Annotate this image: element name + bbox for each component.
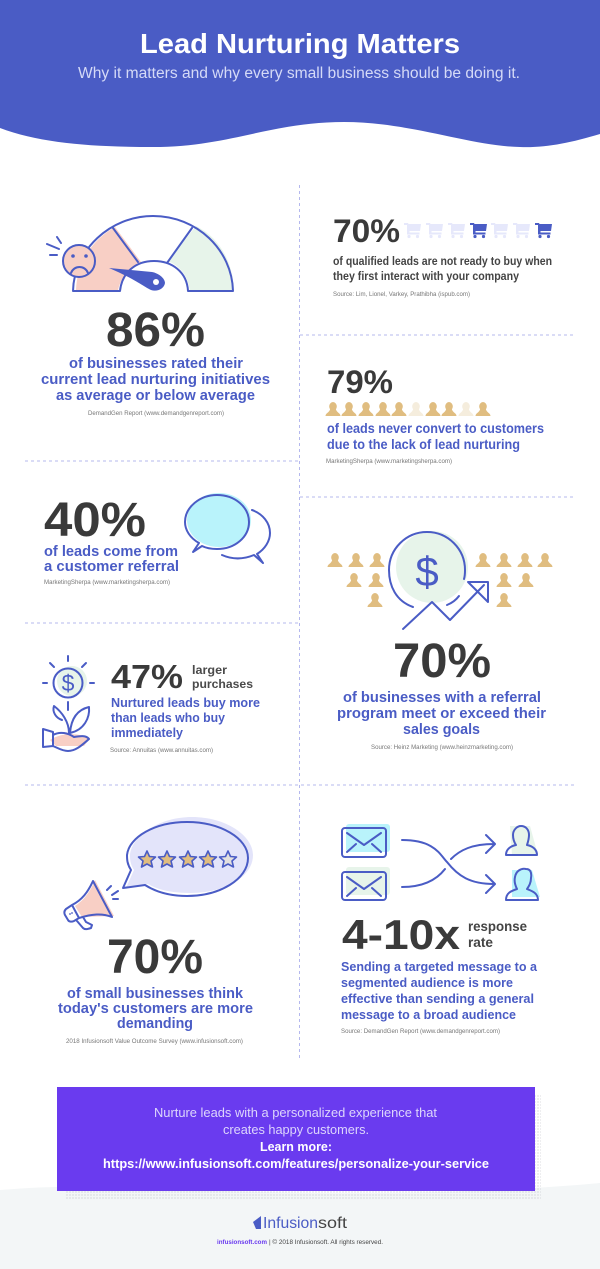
description: immediately (111, 725, 184, 740)
column and row dividers (25, 185, 575, 1058)
description: of leads come from (44, 543, 178, 560)
source: 2018 Infusionsoft Value Outcome Survey (www.infusionsoft.com) (66, 1038, 243, 1045)
description (327, 421, 544, 452)
header banner (0, 0, 600, 147)
description (41, 356, 270, 404)
stat label: larger (192, 663, 227, 677)
description: sales goals (403, 722, 480, 738)
panel: 86 percent gauge (41, 216, 270, 417)
stat: 70%: 70% (393, 635, 491, 688)
icon: envelopes routed to people (342, 824, 540, 900)
description: message to a broad audience (341, 1007, 516, 1022)
panel: 70 percent referral program (328, 531, 552, 751)
stat: 70%: 70% (107, 931, 203, 984)
description (58, 986, 253, 1032)
panel: 40 percent referral (44, 493, 270, 586)
source: MarketingSherpa (www.marketingsherpa.com) (326, 458, 452, 465)
panel: 70 percent demanding customers (58, 817, 253, 1045)
call to action text: Nurture leads with a personalized experience that (154, 1106, 438, 1120)
panel: 4-10x response rate (341, 824, 540, 1035)
call to action (57, 1087, 541, 1199)
description: segmented audience is more (341, 975, 513, 990)
stat label: purchases (192, 677, 253, 691)
logo: Infusion (263, 1215, 318, 1232)
description: effective than sending a general (341, 991, 534, 1006)
logo: soft (318, 1215, 348, 1232)
icon: dollar circle with rising arrow: $ (415, 548, 439, 595)
source: Source: Heinz Marketing (www.heinzmarketing.com) (371, 744, 513, 751)
description: Sending a targeted message to a (341, 959, 538, 974)
source: Source: Annuitas (www.annuitas.com) (110, 747, 213, 754)
stat: 47%: 47% (111, 658, 183, 695)
description: demanding (117, 1016, 193, 1032)
description (44, 543, 179, 575)
icon: dollar circle with rising arrow (389, 531, 488, 629)
description: current lead nurturing initiatives (41, 372, 270, 388)
panel: 70 percent carts (333, 213, 552, 298)
footer copyright: | © 2018 Infusionsoft. All rights reserved. (269, 1239, 383, 1246)
description (337, 690, 546, 738)
description: of businesses with a referral (343, 690, 541, 706)
stat label (192, 663, 253, 691)
call to action text: Learn more: (260, 1140, 332, 1154)
call to action text: https://www.infusionsoft.com/features/personalize-your-service (103, 1157, 489, 1171)
source: Source: DemandGen Report (www.demandgenreport.com) (341, 1028, 500, 1035)
description: they first interact with your company (333, 271, 520, 283)
description: today's customers are more (58, 1001, 253, 1017)
description (341, 959, 538, 1022)
panel: 79 percent people (326, 364, 544, 465)
stat: 40%: 40% (44, 494, 146, 547)
icon: money plant in hand: $ (62, 670, 75, 696)
icon: groups of people (328, 553, 552, 607)
description: of small businesses think (67, 986, 244, 1002)
description (333, 256, 552, 283)
description: due to the lack of lead nurturing (327, 437, 520, 452)
description: of businesses rated their (69, 356, 243, 372)
icon: gauge (47, 216, 234, 291)
stat label (468, 918, 527, 950)
subtitle: Why it matters and why every small business should be doing it. (78, 65, 520, 82)
icon: speech bubbles (185, 493, 270, 563)
description: of qualified leads are not ready to buy when (333, 256, 552, 268)
source: MarketingSherpa (www.marketingsherpa.com) (44, 579, 170, 586)
stat: 4-10x: 4-10x (342, 911, 461, 958)
stat: 86%: 86% (106, 304, 205, 357)
logo (253, 1215, 348, 1232)
footer background (0, 1183, 600, 1269)
icon: money plant in hand (43, 656, 94, 751)
description: of leads never convert to customers (327, 421, 544, 436)
call to action text: creates happy customers. (223, 1123, 369, 1137)
description: a customer referral (44, 558, 179, 575)
source: DemandGen Report (www.demandgenreport.com) (88, 410, 224, 417)
stat: 79%: 79% (327, 364, 393, 400)
description: program meet or exceed their (337, 706, 546, 722)
icon: megaphone with star bubble (64, 817, 253, 929)
description: Nurtured leads buy more (111, 695, 260, 710)
source: Source: Lim, Lionel, Varkey, Prathibha (ispub.com) (333, 291, 470, 298)
footer copyright: infusionsoft.com (217, 1240, 267, 1246)
description (111, 695, 260, 740)
description: than leads who buy (111, 710, 226, 725)
footer copyright (217, 1239, 383, 1246)
call to action text (103, 1106, 489, 1171)
stat label: rate (468, 934, 493, 950)
panel: 47 percent larger purchases (43, 656, 260, 754)
stat: 70%: 70% (333, 213, 400, 249)
stat label: response (468, 918, 527, 934)
icon: row of people (326, 402, 490, 416)
description: as average or below average (56, 388, 255, 404)
icon: row of carts (404, 223, 552, 238)
title: Lead Nurturing Matters (140, 28, 460, 59)
